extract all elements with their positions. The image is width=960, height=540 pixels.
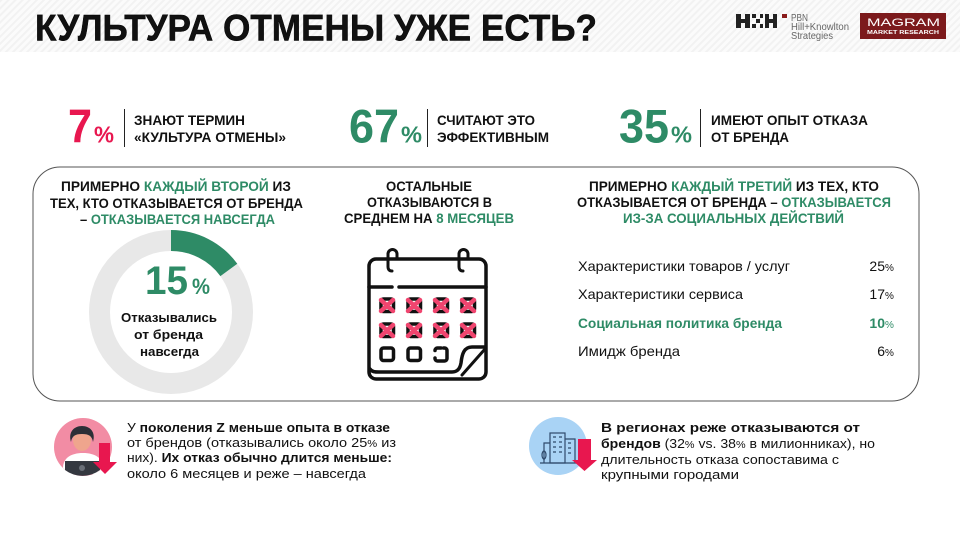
reasons table: % (885, 320, 894, 331)
stat: 67% (349, 100, 549, 152)
logo: Magram Market Research (860, 13, 946, 39)
right heading (577, 177, 891, 226)
stat: 7%: % (94, 122, 114, 148)
reasons table (578, 258, 894, 359)
right heading: ИЗ-ЗА СОЦИАЛЬНЫХ ДЕЙСТВИЙ (623, 209, 844, 226)
stat: 67%: СЧИТАЮТ ЭТО (437, 112, 535, 128)
right heading: ПРИМЕРНО КАЖДЫЙ ТРЕТИЙ ИЗ ТЕХ, КТО (589, 177, 879, 194)
center heading: ОСТАЛЬНЫЕ (386, 178, 472, 194)
donut chart: 15%: % (192, 274, 210, 299)
reasons table: % (885, 263, 894, 274)
left heading: – ОТКАЗЫВАЕТСЯ НАВСЕГДА (80, 211, 275, 227)
reasons table: 10 (869, 315, 885, 331)
stat: 67%: 67 (349, 100, 399, 152)
logo: PBN Hill+Knowlton Strategies (736, 13, 849, 42)
reasons table: Имидж бренда (578, 343, 680, 359)
stat: 7%: «КУЛЬТУРА ОТМЕНЫ» (134, 129, 286, 145)
reasons table: Характеристики сервиса (578, 286, 743, 302)
left heading: ПРИМЕРНО КАЖДЫЙ ВТОРОЙ ИЗ (61, 177, 291, 194)
logo: PBN Hill+Knowlton Strategies: Hill+Knowlton (791, 22, 849, 33)
note: regions: В регионах реже отказываются от (601, 420, 860, 435)
center heading: ОТКАЗЫВАЮТСЯ В (367, 194, 492, 210)
stat: 35%: ОТ БРЕНДА (711, 129, 789, 145)
icon: person with down arrow (54, 418, 117, 476)
reasons table: 17 (869, 286, 885, 302)
donut chart: 15%: Отказывались (121, 310, 217, 325)
note: regions (601, 420, 875, 482)
reasons table: Социальная политика бренда (578, 315, 782, 331)
reasons table: % (885, 291, 894, 302)
note: regions: крупными городами (601, 467, 739, 482)
left heading (50, 177, 303, 227)
stat: 7%: 7 (68, 100, 92, 152)
logo: PBN Hill+Knowlton Strategies: Strategies (791, 31, 833, 42)
donut chart: 15%: 15 (145, 259, 188, 303)
logo: Magram Market Research: MAGRAM (867, 17, 940, 29)
main panel (33, 167, 919, 401)
icon: calendar (369, 250, 486, 379)
stat: 67%: ЭФФЕКТИВНЫМ (437, 129, 549, 145)
stat: 7% (68, 100, 286, 152)
reasons table: 25 (869, 258, 885, 274)
logo: Magram Market Research: MARKET RESEARCH (867, 30, 940, 36)
right heading: ОТКАЗЫВАЕТСЯ ОТ БРЕНДА – ОТКАЗЫВАЕТСЯ (577, 194, 891, 210)
note: regions: длительность отказа сопоставима с (601, 452, 840, 467)
header band (0, 0, 960, 52)
reasons table: % (885, 348, 894, 359)
note: generation Z: них). Их отказ обычно длится меньше: (127, 450, 392, 465)
icon: city building with down arrow (529, 417, 597, 475)
title: КУЛЬТУРА ОТМЕНЫ УЖЕ ЕСТЬ? (35, 8, 597, 48)
note: regions: брендов (32% vs. 38 % в милионниках), но (601, 436, 875, 451)
center heading (344, 178, 514, 226)
donut chart: 15%: от бренда (134, 327, 204, 342)
stat: 67%: % (401, 122, 422, 148)
logo: PBN Hill+Knowlton Strategies: PBN (791, 13, 808, 24)
note: generation Z: У поколения Z меньше опыта в отказе (127, 420, 390, 435)
note: generation Z: около 6 месяцев и реже – навсегда (127, 466, 367, 481)
reasons table: 6 (877, 343, 885, 359)
stat: 35%: 35 (619, 100, 669, 152)
stat: 7%: ЗНАЮТ ТЕРМИН (134, 112, 245, 128)
stat: 35% (619, 100, 868, 152)
note: generation Z (127, 420, 396, 481)
reasons table: Характеристики товаров / услуг (578, 258, 790, 274)
donut chart: 15% (100, 230, 242, 384)
center heading: СРЕДНЕМ НА 8 МЕСЯЦЕВ (344, 210, 514, 226)
donut chart: 15%: навсегда (140, 344, 200, 359)
stat: 35%: ИМЕЮТ ОПЫТ ОТКАЗА (711, 112, 868, 128)
note: generation Z: от брендов (отказывались около 25 % из (127, 435, 396, 450)
left heading: ТЕХ, КТО ОТКАЗЫВАЕТСЯ ОТ БРЕНДА (50, 195, 303, 211)
stat: 35%: % (671, 122, 692, 148)
